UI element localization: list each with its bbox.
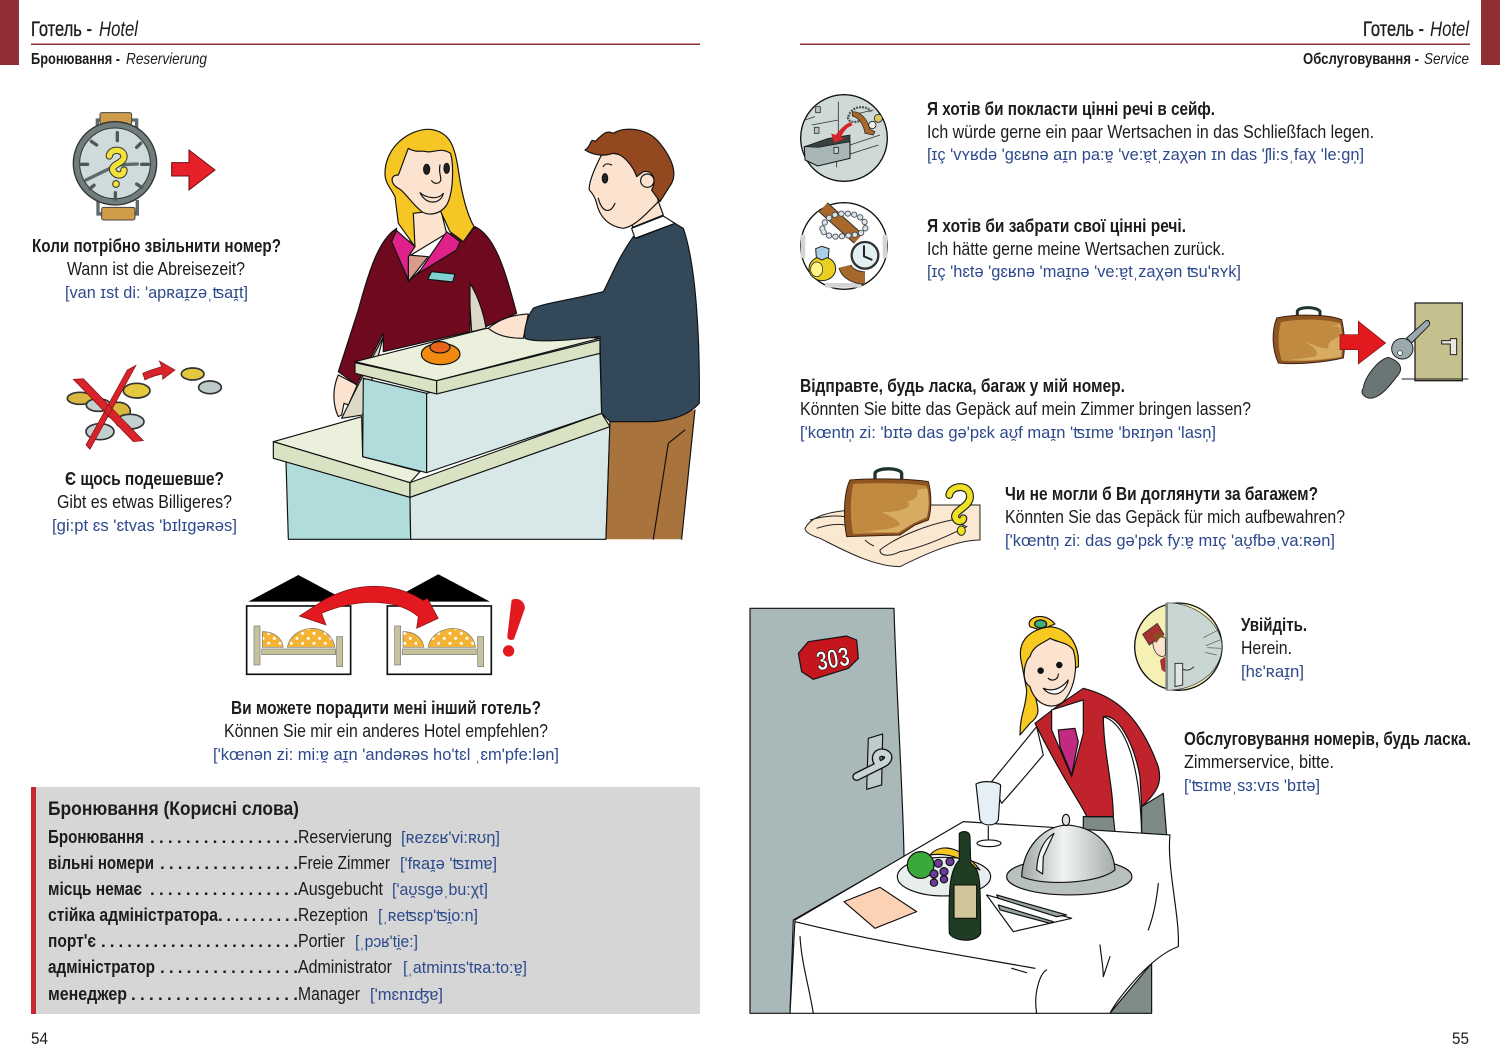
icon: hand holding suitcase with question mark [805, 469, 980, 567]
text block: store luggage: Könnten Sie das Gepäck für mich aufbewahren? [1005, 506, 1345, 527]
text block: come in: Herein. [1241, 637, 1292, 658]
vocabulary row: porter [48, 930, 418, 951]
text block: store luggage [1005, 484, 1345, 550]
text block: retrieve valuables [927, 216, 1241, 281]
vocabulary row: vacancies [48, 852, 497, 873]
vocabulary row: manager: Manager [298, 983, 360, 1004]
vocabulary row: no vacancies: місць немає [48, 879, 142, 899]
text block: checkout time question: Коли потрібно звільнити номер? [32, 236, 281, 256]
vocabulary row: no vacancies [48, 878, 488, 899]
text block: send luggage to room: Відправте, будь ласка, багаж у мій номер. [800, 376, 1125, 396]
vocabulary row: manager: ['mɛnɪʤɐ] [370, 986, 443, 1004]
panel: useful booking vocabulary: Бронювання (Корисні слова) [48, 798, 299, 820]
vocabulary row: porter: Portier [298, 930, 345, 951]
vocabulary row: booking: . . . . . . . . . . . . . . . . . [150, 828, 298, 847]
left page header: Готель - [31, 18, 92, 41]
hotel counter [273, 328, 610, 539]
text block: something cheaper question: Gibt es etwas Billigeres? [57, 491, 232, 512]
vocabulary row: manager: менеджер [48, 984, 127, 1004]
text block: checkout time question: Wann ist die Abreisezeit? [67, 258, 245, 279]
right page header: Service [1424, 51, 1469, 68]
text block: put valuables in the safe: Я хотів би покласти цінні речі в сейф. [927, 99, 1215, 119]
icon: valuables going into safe deposit box [801, 95, 887, 181]
text block: checkout time question: [van ɪst di: 'apʀaɪ̯zəˌʦaɪ̯t] [65, 284, 248, 302]
vocabulary row: booking: Reservierung [298, 826, 392, 847]
icon: jewellery and watch valuables [801, 203, 887, 289]
text block: retrieve valuables: [ɪç 'hɛtə 'gɛʁnə 'maɪ̯nə 've:ɐ̯tˌzaχən ʦu'ʀʏk] [927, 263, 1241, 281]
vocabulary row: manager: . . . . . . . . . . . . . . . . . . . [131, 985, 298, 1004]
grey room door with number sign: 303 [814, 641, 852, 677]
vocabulary row: porter: . . . . . . . . . . . . . . . . . . . . . . . [101, 932, 298, 951]
vocabulary row: booking: Бронювання [48, 827, 144, 847]
vocabulary row: vacancies: вільні номери [48, 853, 154, 873]
right page header: Обслуговування - [1303, 51, 1419, 68]
text block: something cheaper question: [gi:pt ɛs 'ɛtvas 'bɪlɪgəʀəs] [52, 517, 237, 535]
vocabulary row: administrator [48, 956, 527, 977]
page number left: 54 [31, 1029, 48, 1048]
text block: recommend another hotel question: Können Sie mir ein anderes Hotel empfehlen? [224, 720, 548, 741]
vocabulary row: no vacancies: . . . . . . . . . . . . . . . . . [150, 880, 298, 899]
text block: room service please: ['ʦɪmɐˌsɜ:vɪs 'bɪtə] [1184, 777, 1320, 795]
text block: recommend another hotel question: Ви можете порадити мені інший готель? [231, 698, 541, 718]
right page header [800, 0, 1500, 68]
text block: put valuables in the safe: [ɪç 'vʏʁdə 'gɛʁnə aɪ̯n pa:ɐ̯ 've:ɐ̯tˌzaχən ɪn das 'ʃli:sˌfaχ 'le:gn̩] [927, 146, 1364, 164]
vocabulary row: vacancies: . . . . . . . . . . . . . . . . [160, 854, 298, 873]
vocabulary row: vacancies: Freie Zimmer [298, 852, 390, 873]
grey room door with number sign [750, 608, 904, 1013]
vocabulary row: reception desk: [ˌʀeʦɛp'ʦi̯o:n] [378, 907, 478, 925]
text block: room service please [1184, 729, 1471, 795]
right page header: Hotel [1430, 18, 1470, 41]
vocabulary row: no vacancies: Ausgebucht [298, 878, 383, 899]
text block: come in: Увійдіть. [1241, 615, 1307, 635]
text block: something cheaper question: Є щось подешевше? [65, 469, 224, 489]
text block: send luggage to room: ['kœntn̩ zi: 'bɪtə das gə'pɛk aʊ̯f maɪ̯n 'ʦɪmɐ 'bʀɪŋən 'lasn̩] [800, 424, 1216, 442]
receptionist [334, 129, 517, 418]
vocabulary row: administrator: адміністратор [48, 957, 155, 977]
vocabulary row: booking [48, 826, 500, 847]
vocabulary row: vacancies: ['fʀaɪ̯ə 'ʦɪmɐ] [400, 855, 497, 873]
icon: two hotels with curved red arrow and exclamation mark [247, 574, 525, 674]
text block: something cheaper question [52, 469, 237, 535]
vocabulary row: porter: порт'є [48, 931, 96, 951]
icon: crossed out coins with arrow to fewer coins [67, 361, 221, 449]
vocabulary row: booking: [ʀezɛʁ'vi:ʀʊŋ] [401, 829, 500, 847]
guest [488, 129, 699, 539]
left page header: Бронювання - [31, 51, 120, 68]
illustration: waitress serving room service at the door [750, 608, 1178, 1013]
vocabulary row: administrator: . . . . . . . . . . . . . . . . [160, 958, 298, 977]
vocabulary row: administrator: Administrator [298, 956, 392, 977]
icon: wristwatch with question mark and red arrow [73, 113, 215, 220]
text block: come in: [hɛ'ʀaɪ̯n] [1241, 663, 1304, 681]
vocabulary row: no vacancies: ['aʊ̯sgəˌbu:χt] [392, 881, 488, 899]
vocabulary row: reception desk: . . . . . . . . . . [218, 906, 298, 925]
room service table with food [790, 782, 1178, 1013]
text block: send luggage to room [800, 376, 1251, 442]
text block: send luggage to room: Könnten Sie bitte das Gepäck auf mein Zimmer bringen lassen? [800, 398, 1251, 419]
text block: retrieve valuables: Я хотів би забрати свої цінні речі. [927, 216, 1186, 236]
vocabulary row: manager [48, 983, 443, 1004]
waitress figure [992, 616, 1167, 835]
right page header: Готель - [1363, 18, 1424, 41]
vocabulary row: reception desk: стійка адміністратора [48, 905, 219, 925]
vocabulary row: reception desk [48, 904, 478, 925]
panel: useful booking vocabulary [31, 787, 700, 1014]
text block: checkout time question [32, 236, 281, 302]
left page header: Hotel [99, 18, 139, 41]
vocabulary row: porter: [ˌpɔʁ'ti̯e:] [355, 933, 418, 951]
vocabulary row: reception desk: Rezeption [298, 904, 368, 925]
vocabulary row: administrator: [ˌatminɪs'tʀa:to:ɐ̯] [403, 959, 527, 977]
text block: come in [1241, 615, 1307, 681]
left page header [0, 0, 700, 68]
icon: suitcase, arrow, key and room door [1273, 303, 1468, 398]
text block: store luggage: ['kœntn̩ zi: das gə'pɛk fy:ɐ̯ mɪç 'aʊ̯fbəˌva:ʀən] [1005, 532, 1335, 550]
text block: store luggage: Чи не могли б Ви доглянути за багажем? [1005, 484, 1318, 504]
text block: put valuables in the safe: Ich würde gerne ein paar Wertsachen in das Schließfach legen. [927, 121, 1374, 142]
text block: recommend another hotel question [213, 698, 559, 764]
text block: retrieve valuables: Ich hätte gerne meine Wertsachen zurück. [927, 238, 1225, 259]
illustration: receptionist and guest at hotel desk [273, 129, 699, 539]
text block: recommend another hotel question: ['kœnən zi: mi:ɐ̯ aɪ̯n 'andəʀəs ho'tɛl ˌɛm'pfe:lən] [213, 746, 559, 764]
left page header: Reservierung [126, 51, 207, 68]
icon: bellhop peeking behind opening door [1135, 603, 1222, 690]
text block: put valuables in the safe [927, 99, 1374, 164]
text block: room service please: Zimmerservice, bitte. [1184, 751, 1334, 772]
page number right: 55 [1452, 1029, 1469, 1048]
